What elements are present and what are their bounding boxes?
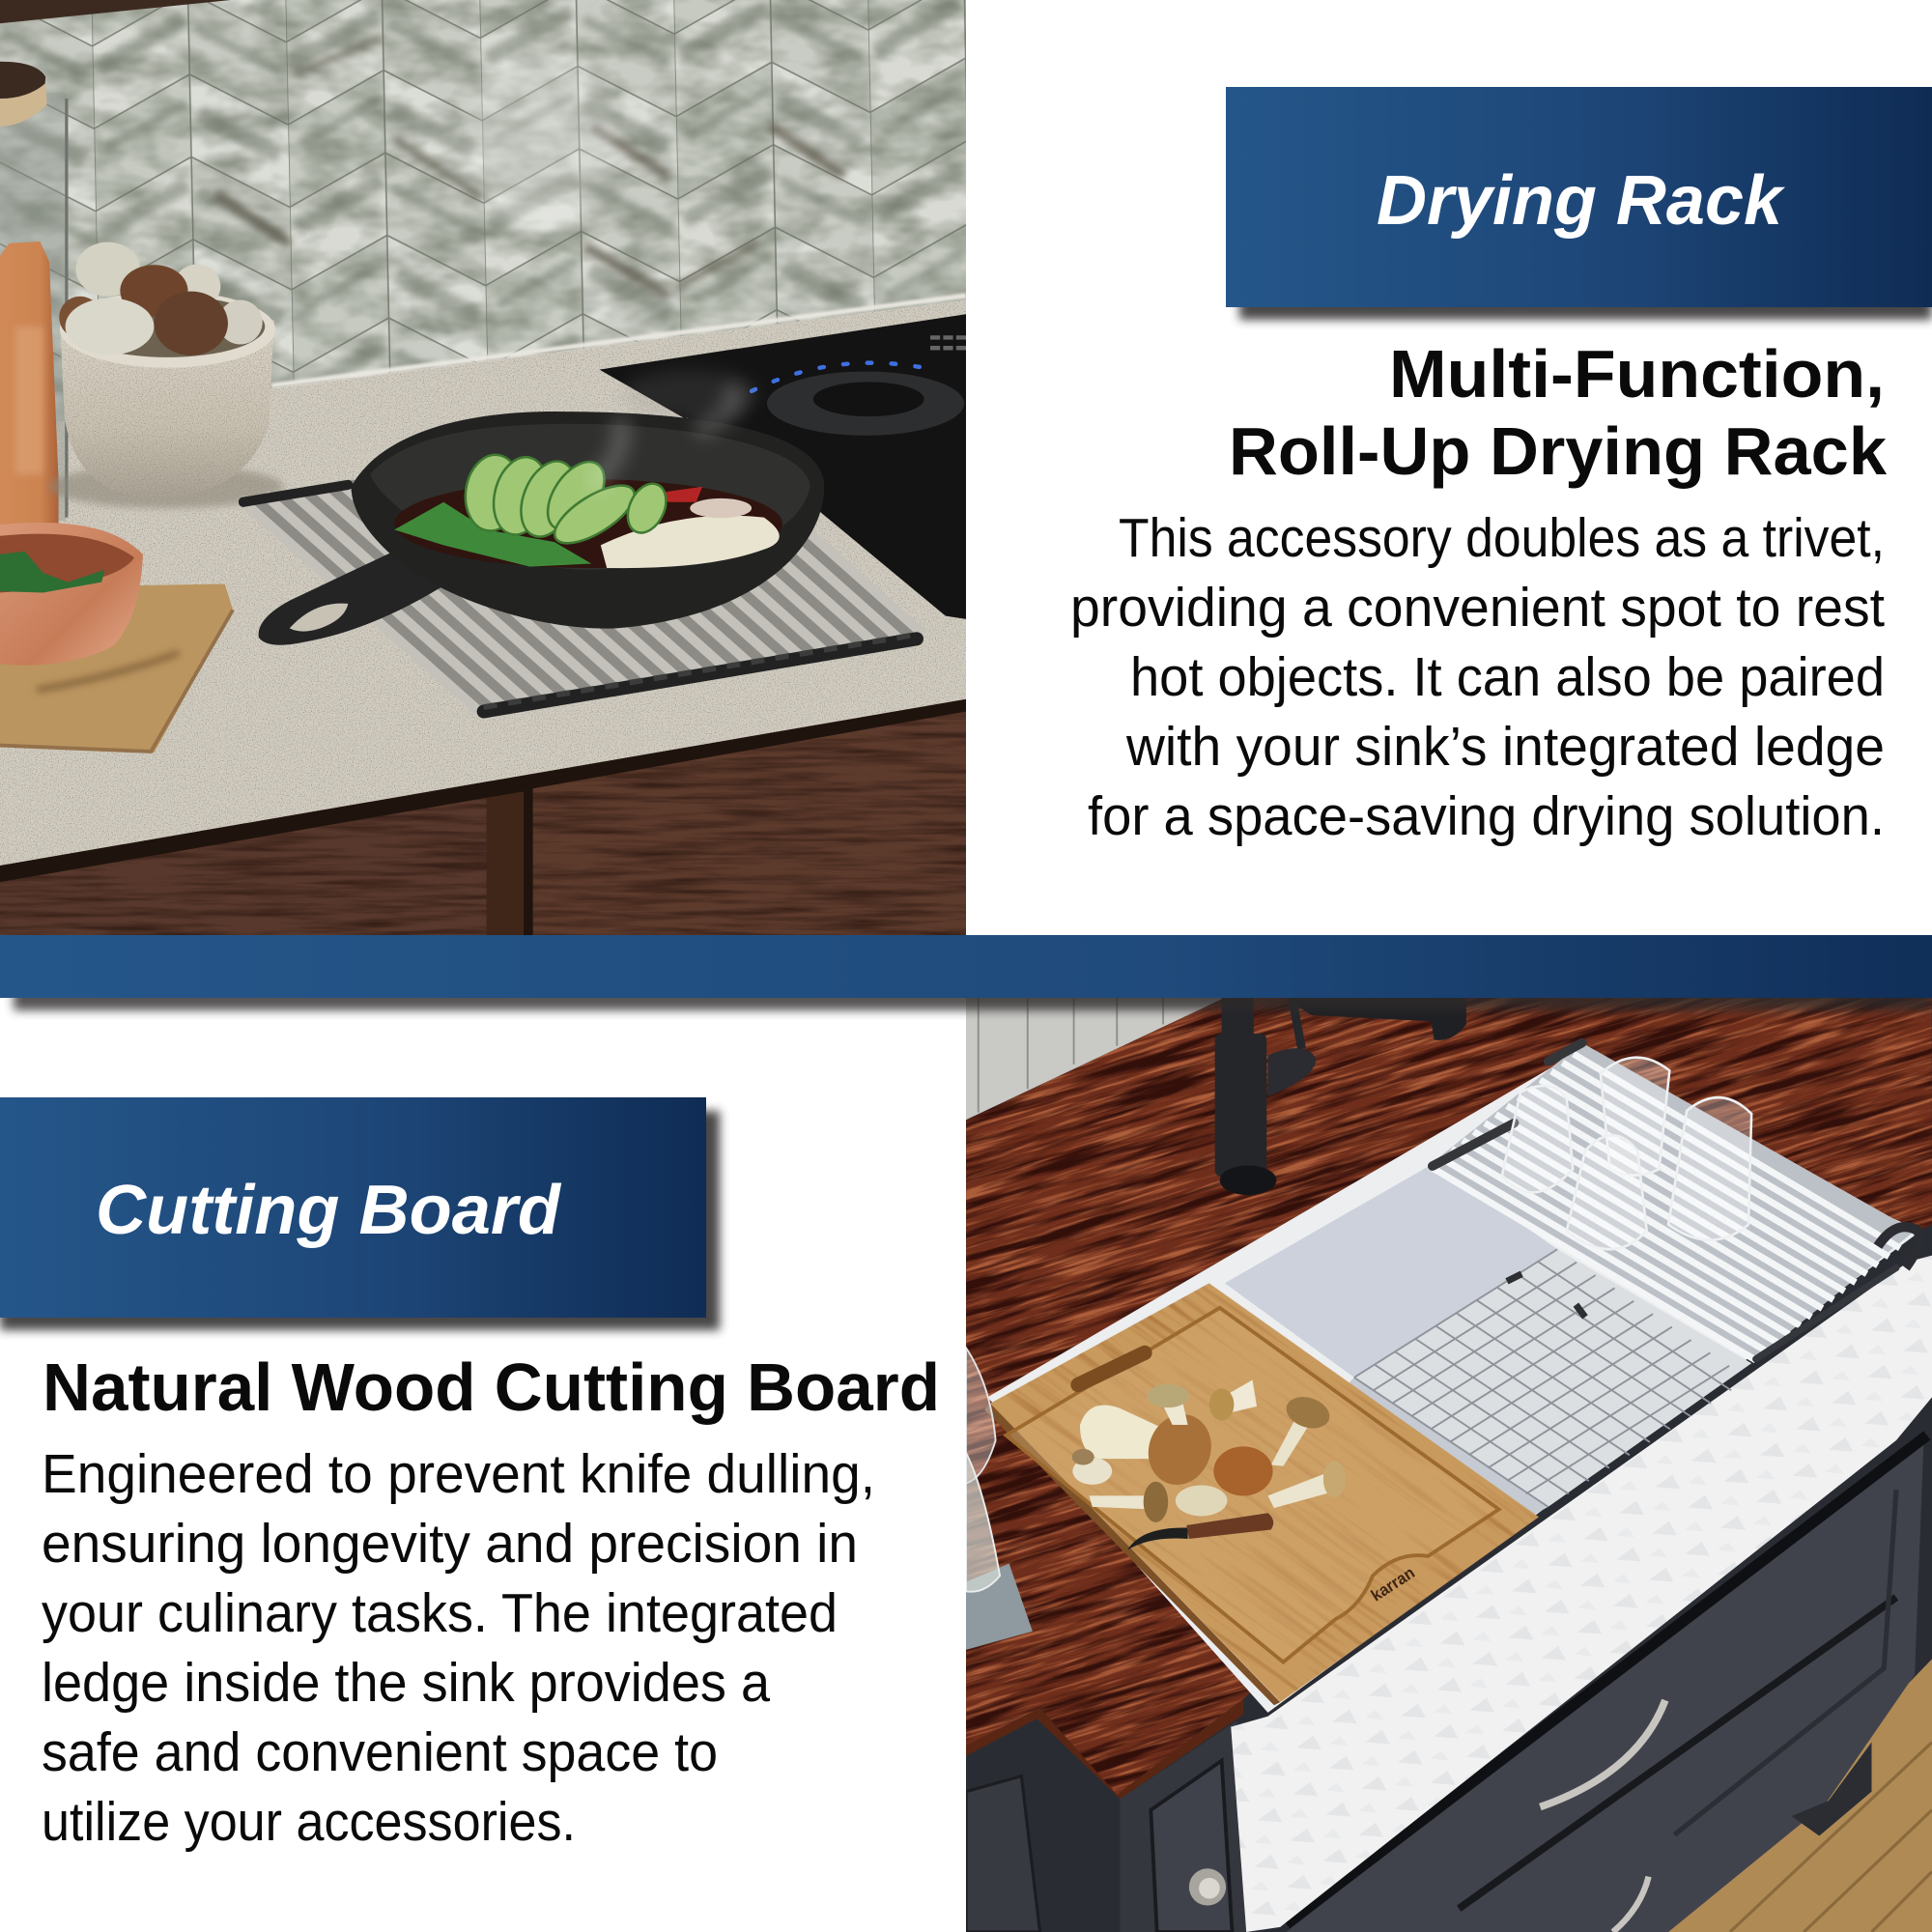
drinking glasses on rack <box>1502 1058 1751 1249</box>
drying rack description: for a space-saving drying solution. <box>1088 785 1885 847</box>
bamboo cutting board <box>947 1219 1539 1762</box>
roll-up rack over sink <box>1428 1043 1919 1360</box>
cast iron skillet <box>259 388 824 645</box>
drying rack description: providing a convenient spot to rest <box>1070 577 1885 639</box>
roll-up drying rack <box>241 421 923 712</box>
cutting board header banner: Cutting Board <box>96 1172 562 1249</box>
olive wood board <box>0 584 233 753</box>
jar of juice <box>0 62 67 525</box>
copper bowl with herbs <box>0 523 143 666</box>
sink apron front <box>1231 1256 1932 1932</box>
dark shelf at top <box>0 0 231 23</box>
horizontal blue divider band <box>0 935 1932 1010</box>
drawers <box>1287 1317 1932 1932</box>
stone countertop <box>0 300 966 866</box>
glassware and towel at left <box>966 1348 1033 1650</box>
panel: drying rack text <box>1070 87 1932 847</box>
cutting board description: Engineered to prevent knife dulling, <box>42 1443 875 1505</box>
induction cooktop <box>600 314 966 619</box>
drying rack header banner: Drying Rack <box>1377 162 1786 240</box>
left cabinet door and knob <box>966 1720 1249 1932</box>
steam <box>591 388 734 487</box>
countertop front edge <box>966 1699 1243 1799</box>
drying rack heading: Roll-Up Drying Rack <box>1229 413 1887 489</box>
juice groove <box>1006 1308 1499 1662</box>
drying rack description: hot objects. It can also be paired <box>1130 646 1885 708</box>
panel: cutting board text <box>0 1097 940 1853</box>
cutting board description: utilize your accessories. <box>42 1791 576 1853</box>
drying rack description: with your sink’s integrated ledge <box>1125 716 1885 778</box>
cutting board description: ensuring longevity and precision in <box>42 1513 858 1575</box>
handle slot <box>1078 1352 1145 1385</box>
black faucet <box>1215 998 1466 1195</box>
chevron tile backsplash <box>0 0 966 443</box>
bottom grid <box>1354 1249 1751 1507</box>
bowl of eggs <box>49 242 283 508</box>
photo: farmhouse sink with cutting board and rack <box>966 998 1932 1932</box>
drying rack heading: Multi-Function, <box>1389 336 1885 412</box>
skillet food <box>394 451 782 568</box>
drying rack heading <box>1229 336 1887 489</box>
mushrooms <box>1072 1379 1346 1522</box>
cutting board description <box>42 1443 875 1853</box>
knife <box>1127 1513 1273 1550</box>
drying rack header banner <box>1226 87 1932 320</box>
wood floor <box>1668 1659 1932 1932</box>
sink interior wall <box>1225 1163 1557 1378</box>
backsplash highlight edge <box>271 296 966 385</box>
cutting board description: your culinary tasks. The integrated <box>42 1582 838 1644</box>
cutting board description: safe and convenient space to <box>42 1721 718 1783</box>
steam haze on the wall <box>469 49 616 234</box>
dark cabinet base <box>966 998 1932 1932</box>
sink rim <box>987 1067 1921 1713</box>
photo: skillet on roll-up drying rack <box>0 0 966 935</box>
drying rack description <box>1070 507 1885 847</box>
cutting board description: ledge inside the sink provides a <box>42 1652 770 1714</box>
cabinet doors <box>0 699 966 935</box>
brand mark: karran <box>1367 1563 1418 1605</box>
cutting board heading: Natural Wood Cutting Board <box>43 1350 940 1425</box>
walnut butcher block countertop <box>779 800 1932 1833</box>
wall tile <box>966 998 1225 1120</box>
cutting board header banner <box>0 1097 720 1330</box>
